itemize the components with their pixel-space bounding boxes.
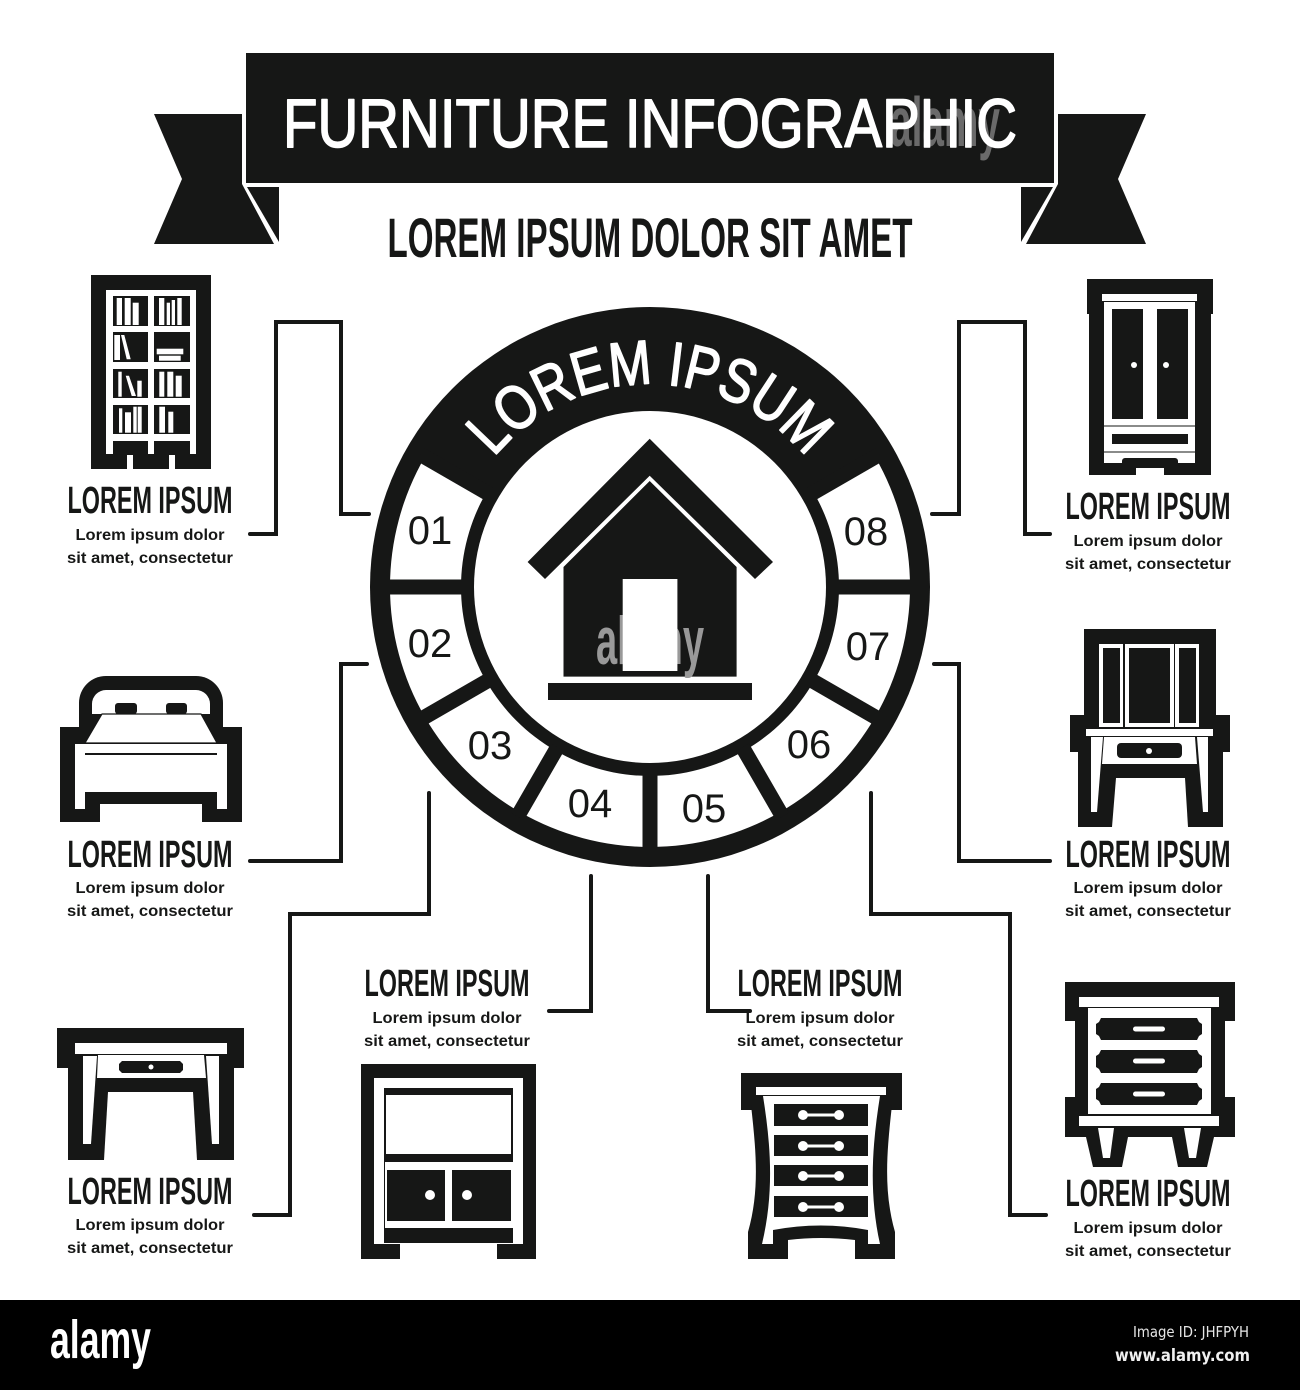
- label: bottom left: [67, 1171, 233, 1257]
- segment numbers: 08: [844, 510, 888, 554]
- label: bottom centre right: sit amet, consectetur: [737, 1033, 903, 1050]
- title banner: [154, 53, 1146, 244]
- label: middle right: Lorem ipsum dolor: [1074, 880, 1222, 897]
- segment numbers: 01: [408, 509, 452, 553]
- icon: cabinet: [361, 1064, 536, 1259]
- label: bottom centre right: [737, 963, 903, 1050]
- icon: chest of drawers: [741, 1073, 902, 1259]
- segment numbers: [408, 509, 890, 831]
- label: middle right: sit amet, consectetur: [1065, 903, 1231, 920]
- icon: dressing table: [1070, 629, 1230, 827]
- label: middle left: LOREM IPSUM: [68, 834, 232, 876]
- footer bar: www.alamy.com: [1115, 1346, 1250, 1366]
- label: bottom right: Lorem ipsum dolor: [1074, 1220, 1222, 1237]
- segment numbers: 03: [468, 724, 512, 768]
- subtitle: LOREM IPSUM DOLOR SIT AMET: [388, 206, 912, 269]
- label: middle right: [1065, 834, 1231, 920]
- label: bottom left: sit amet, consectetur: [67, 1240, 233, 1257]
- label: top right: Lorem ipsum dolor: [1074, 533, 1222, 550]
- title banner: FURNITURE INFOGRAPHIC: [283, 85, 1017, 162]
- label: bottom centre left: sit amet, consectetur: [364, 1033, 530, 1050]
- icon: table: [57, 1028, 244, 1160]
- title banner: alamy: [890, 83, 1000, 161]
- label: bottom centre left: [364, 963, 530, 1050]
- label: bottom centre right: Lorem ipsum dolor: [746, 1010, 894, 1027]
- icon: bed: [60, 676, 242, 822]
- segment numbers: 04: [568, 782, 612, 826]
- segment numbers: 07: [846, 625, 890, 669]
- label: bottom left: Lorem ipsum dolor: [76, 1217, 224, 1234]
- label: bottom right: [1065, 1173, 1231, 1260]
- wheel heading: LOREM IPSUM: [464, 340, 835, 455]
- label: top left: LOREM IPSUM: [68, 480, 232, 522]
- connector lines: [250, 322, 1050, 1215]
- footer bar: alamy: [50, 1310, 151, 1370]
- label: bottom centre left: Lorem ipsum dolor: [372, 1010, 522, 1027]
- segment numbers: 02: [408, 622, 452, 666]
- label: middle left: [67, 834, 233, 920]
- segment numbers: 05: [682, 787, 726, 831]
- label: bottom left: LOREM IPSUM: [68, 1171, 232, 1213]
- segment numbers: 06: [787, 723, 831, 767]
- label: top left: [67, 480, 233, 567]
- icon: house: alamy: [596, 603, 704, 679]
- icon: bookcase: [91, 275, 211, 469]
- label: top right: [1065, 486, 1231, 573]
- footer bar: [0, 1300, 1300, 1390]
- icon: wardrobe: [1087, 279, 1213, 475]
- label: bottom centre right: LOREM IPSUM: [738, 963, 902, 1005]
- label: top right: sit amet, consectetur: [1065, 556, 1231, 573]
- icon: nightstand: [1065, 982, 1235, 1167]
- footer bar: Image ID: JHFPYH: [1133, 1323, 1249, 1341]
- icon: house: [528, 439, 773, 700]
- label: bottom centre left: LOREM IPSUM: [364, 963, 530, 1005]
- label: middle left: Lorem ipsum dolor: [76, 880, 224, 897]
- central wheel: [370, 307, 930, 867]
- label: middle left: sit amet, consectetur: [67, 903, 233, 920]
- label: top left: sit amet, consectetur: [67, 550, 233, 567]
- label: bottom right: sit amet, consectetur: [1065, 1243, 1231, 1260]
- label: top left: Lorem ipsum dolor: [76, 527, 224, 544]
